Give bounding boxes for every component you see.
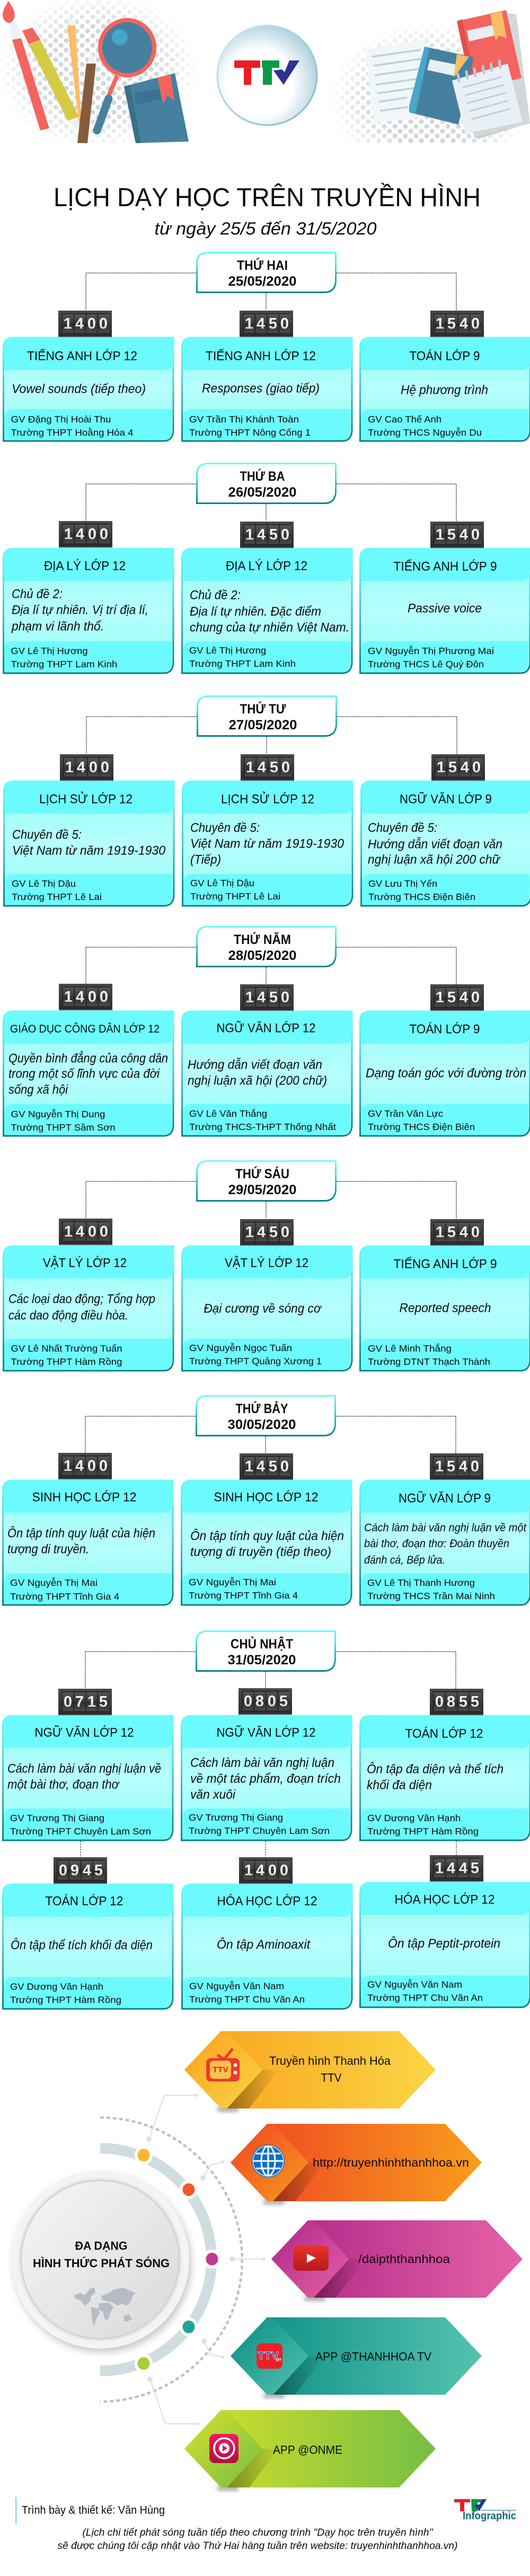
teacher: GV Lê Minh Thắng [368, 1343, 452, 1354]
clock 14:00 [239, 1857, 293, 1884]
clock 14:50: 1450 [245, 526, 289, 543]
card: Ngữ văn 9 [360, 1453, 530, 1605]
topic: Chủ đề 2: [12, 587, 63, 601]
teacher [10, 1577, 119, 1602]
teacher: Trường THCS Nguyễn Du [368, 427, 482, 438]
topic [7, 1525, 155, 1556]
clock 15:40: 1540 [436, 315, 480, 332]
icon: TTV go [257, 2343, 282, 2369]
topic: khối đa diện [367, 1778, 432, 1793]
teacher: GV Nguyễn Thị Mai [10, 1577, 98, 1588]
teacher: GV Nguyễn Thị Mai [189, 1576, 276, 1587]
teacher: GV Nguyễn Ngọc Tuấn [189, 1342, 292, 1353]
teacher: Trường THPT Quảng Xương 1 [189, 1356, 322, 1366]
topic: Passive voice [408, 601, 482, 616]
topic: Ôn tập đa diện và thể tích [367, 1762, 504, 1777]
day header: Chủ Nhật: 31/05/2020 [228, 1653, 296, 1668]
clock 14:00: 1400 [64, 1223, 108, 1240]
topic: Cách làm bài văn nghị luận về [7, 1762, 161, 1776]
clock 15:40: 1540 [435, 1458, 479, 1475]
subject: SINH HỌC LỚP 12 [32, 1490, 137, 1504]
day header: Thứ Ba [86, 463, 456, 521]
teacher [189, 1108, 336, 1132]
day header: Thứ Hai: 25/05/2020 [228, 274, 297, 289]
title: LỊCH DẠY HỌC TRÊN TRUYỀN HÌNH [54, 183, 481, 212]
day header: Thứ Tư: THỨ TƯ [240, 701, 286, 717]
topic: các dao động điều hòa. [8, 1308, 128, 1323]
topic: Vowel sounds (tiếp theo) [12, 382, 146, 396]
subtitle: từ ngày 25/5 đến 31/5/2020 [155, 218, 377, 239]
clock 15:40 [430, 1219, 484, 1246]
teacher: GV Nguyễn Văn Nam [189, 1980, 284, 1991]
teacher: GV Lê Nhất Trường Tuấn [11, 1343, 122, 1354]
teacher: GV Dương Văn Hạnh [367, 1813, 461, 1823]
topic [367, 1762, 504, 1793]
topic: đánh cá, Bếp lửa. [364, 1554, 445, 1566]
topic: Ôn tập tính quy luật của hiện [190, 1529, 344, 1543]
teacher: GV Lưu Thị Yến [368, 878, 437, 889]
centre heading: ĐA DẠNG [75, 2239, 127, 2253]
topic [190, 821, 344, 867]
clock 15:40 [430, 1453, 483, 1480]
ring dots [135, 2146, 221, 2373]
clock 15:40: 1540 [436, 1224, 480, 1241]
clock 14:00 [60, 754, 113, 781]
channel: TTV app [231, 2317, 482, 2398]
teacher: Trường THCS Trần Mai Ninh [367, 1591, 495, 1601]
teacher: Trường THPT Sầm Sơn [11, 1122, 116, 1133]
subject: SINH HỌC LỚP 12 [214, 1490, 318, 1504]
card: Địa lý 12 part 2 [182, 522, 352, 673]
card: Sinh học 12 [3, 1453, 173, 1605]
centre heading: HÌNH THỨC PHÁT SÓNG [33, 2257, 170, 2270]
app text: APP @ONME [273, 2443, 342, 2456]
topic: một bài thơ, đoạn thơ [7, 1778, 120, 1792]
topic: tượng di truyền (tiếp theo) [190, 1545, 331, 1559]
teacher [367, 1813, 479, 1837]
teacher: Trường THPT Hàm Rồng [367, 1826, 479, 1837]
centre circle [11, 2171, 191, 2352]
day header: Thứ Hai: THỨ HAI [237, 257, 288, 273]
subject: NGỮ VĂN LỚP 12 [216, 1021, 316, 1036]
teacher [367, 1577, 495, 1601]
logo: TTV Infographic: Infographic [463, 2510, 516, 2522]
topic: Hướng dẫn viết đoạn văn [368, 836, 502, 851]
teacher: GV Trương Thị Giang [10, 1813, 104, 1823]
teacher [12, 878, 102, 902]
teacher: Trường THPT Nông Cống 1 [189, 427, 311, 438]
teacher [10, 1981, 121, 2005]
topic: Reported speech [400, 1301, 491, 1316]
note: sẽ được chúng tôi cập nhật vào Thứ Hai hàng tuần trên website: truyenhinhthanhhoa.vn) [57, 2540, 458, 2552]
topic [364, 1521, 527, 1566]
topic [12, 828, 165, 858]
topic: Chủ đề 2: [190, 588, 241, 602]
card: Toán 12 [360, 1689, 530, 1840]
topic: Hệ phương trình [401, 383, 488, 398]
card: Hóa học 12 part 2 [360, 1855, 530, 2007]
card: Tiếng Anh 12 [3, 311, 173, 441]
clock 14:50: 1450 [246, 759, 290, 776]
topic [190, 1529, 344, 1559]
clock 08:05 [238, 1688, 292, 1715]
icon: TTV go: TTV [258, 2350, 279, 2362]
teacher: GV Trần Thị Khánh Toàn [189, 414, 299, 425]
teacher [368, 1343, 490, 1367]
clock 08:55: 0855 [435, 1693, 479, 1710]
teacher: GV Nguyễn Thị Dung [11, 1108, 105, 1119]
day header: Thứ Năm: THỨ NĂM [234, 931, 291, 947]
clock 14:50 [240, 522, 294, 548]
day header: Thứ Năm [86, 927, 456, 984]
teacher: Trường THPT Chu Văn An [367, 1992, 483, 2003]
teacher [11, 1343, 122, 1367]
clock 14:50: 1450 [245, 1224, 289, 1241]
topic [8, 1051, 168, 1097]
teacher [189, 645, 296, 669]
subject: NGỮ VĂN LỚP 12 [35, 1725, 134, 1740]
subject: NGỮ VĂN LỚP 9 [400, 792, 492, 807]
subject: HÓA HỌC LỚP 12 [217, 1894, 317, 1908]
card: Ngữ văn 12 part 2 [181, 1688, 351, 1840]
logo: TTV circle [217, 25, 317, 125]
logo: TTV Infographic [454, 2499, 516, 2522]
topic: Địa lí tự nhiên. Vị trí địa lí, [12, 603, 148, 617]
teacher: Trường THPT Lam Kinh [11, 659, 118, 669]
teacher: Trường THPT Tĩnh Gia 4 [10, 1591, 119, 1602]
topic [7, 1762, 161, 1792]
teacher: GV Nguyễn Thị Phương Mai [368, 645, 494, 656]
teacher: GV Cao Thế Anh [368, 414, 441, 425]
app text: APP @THANHHOA TV [315, 2350, 431, 2363]
card: Toán 9 [360, 311, 530, 441]
icon: play button [293, 2246, 329, 2271]
topic: Các loại dao động; Tổng hợp [8, 1292, 155, 1306]
channel text [269, 2054, 391, 2084]
topic: Ôn tập tính quy luật của hiện [7, 1525, 155, 1540]
subject: NGỮ VĂN LỚP 12 [216, 1725, 316, 1740]
topic: Địa lí tự nhiên. Đặc điểm [190, 604, 321, 619]
clock 07:15: 0715 [64, 1693, 108, 1710]
clock 14:00: 1400 [64, 526, 108, 543]
clock 15:40: 1540 [436, 526, 480, 543]
channel: ONME app [184, 2410, 436, 2491]
teacher: GV Lê Thị Dậu [12, 878, 76, 889]
teacher: Trường THPT Lê Lai [190, 891, 280, 902]
channel: YouTube [271, 2220, 523, 2301]
credit: Trình bày & thiết kế: Văn Hùng [22, 2504, 165, 2517]
card: Giáo dục công dân 12 [3, 984, 173, 1136]
topic: Chuyên đề 5: [368, 821, 437, 835]
topic [188, 1057, 327, 1088]
teacher: Trường THPT Chu Văn An [189, 1994, 305, 2005]
teacher: Trường THPT Lê Lai [12, 892, 102, 902]
subject: TOÁN LỚP 9 [409, 349, 480, 364]
topic: Ôn tập thể tích khối đa diện [11, 1938, 153, 1953]
topic: văn xuôi [190, 1787, 236, 1802]
topic: Cách làm bài văn nghị luận [190, 1755, 334, 1770]
card: Ngữ văn 9 [361, 754, 530, 906]
day header: Thứ Sáu [86, 1161, 456, 1219]
note [57, 2527, 458, 2552]
day header: Thứ Hai [86, 252, 456, 310]
topic: nghị luận xã hội (200 chữ) [188, 1074, 327, 1088]
clock 09:45 [54, 1857, 107, 1884]
day header: Thứ Bảy [85, 1396, 456, 1453]
topic: bài thơ, đoạn thơ: Đoàn thuyền [364, 1537, 509, 1550]
teacher: Trường DTNT Thạch Thành [368, 1356, 490, 1367]
subject: LỊCH SỬ LỚP 12 [39, 791, 132, 807]
header illustration: right books and notes [329, 10, 530, 143]
clock 14:00 [59, 1219, 112, 1246]
website text: http://truyenhinhthanhhoa.vn [313, 2156, 469, 2169]
channel text: TTV [321, 2071, 342, 2084]
channel: TTV television [184, 2031, 436, 2112]
teacher [11, 1108, 116, 1133]
subject: TIẾNG ANH LỚP 9 [393, 559, 497, 574]
subject: TOÁN LỚP 12 [405, 1727, 483, 1741]
card: Lịch sử 12 [4, 754, 174, 906]
subject: TIẾNG ANH LỚP 12 [27, 349, 137, 364]
clock 14:00: 1400 [64, 989, 108, 1005]
clock 15:40: 1540 [437, 759, 481, 776]
teacher: GV Nguyễn Văn Nam [367, 1979, 462, 1990]
teacher [190, 878, 280, 902]
teacher: GV Lê Văn Thắng [189, 1108, 267, 1119]
day header: Chủ Nhật [85, 1631, 456, 1689]
day header: Thứ Bảy: THỨ BẢY [235, 1400, 288, 1416]
clock 08:55 [430, 1689, 483, 1715]
clock 14:50: 1450 [245, 315, 289, 332]
teacher [189, 414, 311, 438]
card: Tiếng Anh 9 [360, 1219, 530, 1371]
teacher [189, 1342, 322, 1366]
topic: Chuyên đề 5: [190, 821, 260, 835]
teacher [368, 414, 482, 438]
clock 14:00: 1400 [64, 315, 108, 332]
teacher: Trường THPT Chuyên Lam Sơn [10, 1826, 151, 1837]
icon: ONME [209, 2434, 238, 2463]
card: Ngữ văn 12 [3, 1689, 173, 1840]
teacher [189, 1980, 305, 2005]
teacher [11, 414, 134, 438]
clock 14:50 [240, 1453, 293, 1480]
clock 08:05: 0805 [244, 1693, 288, 1710]
teacher: Trường THPT Hàm Rồng [10, 1995, 121, 2005]
clock 14:00 [58, 1453, 112, 1480]
clock 14:50: 1450 [245, 989, 289, 1006]
card: Hóa học 12 [182, 1857, 352, 2009]
teacher: GV Dương Văn Hạnh [10, 1981, 103, 1992]
teacher: GV Lê Thị Hương [189, 645, 266, 656]
clock 09:45: 0945 [59, 1862, 103, 1879]
card: Tiếng Anh 12 part 2 [182, 311, 352, 441]
topic [368, 821, 502, 867]
topic: (Tiếp) [190, 852, 221, 867]
connectors to second Sunday row [81, 1841, 456, 1857]
topic: tượng di truyền. [7, 1542, 89, 1556]
teacher: GV Trần Văn Lực [368, 1108, 443, 1119]
topic: Chuyên đề 5: [12, 828, 82, 842]
teacher: Trường THPT Lam Kinh [189, 658, 296, 669]
teacher [11, 646, 118, 669]
topic: Quyền bình đẳng của công dân [8, 1051, 168, 1065]
clock 14:50 [240, 984, 294, 1011]
clock 15:40 [430, 984, 484, 1011]
card: Địa lý 12 [3, 521, 173, 673]
youtube text: /daipththanhhoa [358, 2253, 450, 2265]
day header: Chủ Nhật: CHỦ NHẬT [231, 1636, 293, 1652]
topic: Việt Nam từ năm 1919-1930 [12, 844, 165, 858]
topic: Hướng dẫn viết đoạn văn [188, 1057, 322, 1072]
clock 14:50 [240, 311, 293, 337]
subject: TIẾNG ANH LỚP 12 [206, 349, 316, 364]
topic: nghị luận xã hội 200 chữ [368, 852, 500, 867]
teacher: GV Lê Thị Thanh Hương [367, 1577, 475, 1588]
day header: Thứ Sáu: THỨ SÁU [235, 1166, 289, 1181]
day header: Thứ Bảy: 30/05/2020 [228, 1417, 296, 1432]
teacher: Trường THPT Hoằng Hóa 4 [11, 427, 134, 438]
subject: ĐỊA LÝ LỚP 12 [44, 559, 126, 574]
icon: TV: TTV [213, 2065, 228, 2075]
icon: globe [252, 2145, 284, 2177]
subject: TOÁN LỚP 12 [46, 1894, 123, 1908]
clock 14:00: 1400 [64, 1458, 108, 1475]
clock 15:40 [430, 522, 484, 548]
subject: LỊCH SỬ LỚP 12 [221, 791, 314, 807]
topic [11, 587, 148, 634]
teacher: GV Lê Thị Hương [11, 646, 88, 656]
clock 14:00 [59, 984, 112, 1010]
card: Toán 9 [360, 984, 530, 1136]
icon: TV [206, 2049, 240, 2081]
teacher: Trường THPT Chuyên Lam Sơn [189, 1825, 330, 1836]
card: Ngữ văn 12 [182, 984, 352, 1136]
clock 15:40: 1540 [436, 989, 480, 1006]
day header: Thứ Tư [86, 696, 457, 754]
card: Toán 12 row 2 [3, 1857, 173, 2009]
teacher: Trường THPT Tĩnh Gia 4 [189, 1590, 298, 1601]
clock 14:00 [58, 311, 112, 337]
icon: world map [74, 2287, 136, 2326]
clock 15:40 [431, 754, 485, 781]
topic: Responses (giao tiếp) [202, 382, 320, 395]
day header: Thứ Tư: 27/05/2020 [229, 718, 297, 733]
topic [190, 1755, 341, 1802]
subject: NGỮ VĂN LỚP 9 [399, 1490, 491, 1505]
topic: chung của tự nhiên Việt Nam. [190, 620, 349, 635]
centre heading [33, 2239, 170, 2270]
teacher [189, 1576, 298, 1601]
day header: Thứ Sáu: 29/05/2020 [228, 1183, 297, 1197]
subject: VẬT LÝ LỚP 12 [43, 1256, 127, 1270]
clock 14:50 [240, 1219, 294, 1246]
teacher: Trường THCS Lê Quý Đôn [368, 659, 484, 669]
clock 14:00: 1400 [65, 759, 109, 776]
teacher [10, 1813, 151, 1837]
topic: phạm vi lãnh thổ. [11, 619, 104, 634]
day header: Thứ Năm: 28/05/2020 [228, 948, 297, 963]
subject: GIÁO DỤC CÔNG DÂN LỚP 12 [10, 1022, 160, 1035]
teacher [367, 1979, 483, 2003]
clock 14:50: 1450 [245, 1458, 289, 1475]
icon: TTV go: go [276, 2357, 281, 2362]
teacher [368, 645, 494, 669]
header illustration: left school supplies [0, 0, 201, 143]
card: Vật lý 12 part 2 [182, 1219, 352, 1371]
subject: TIẾNG ANH LỚP 9 [393, 1256, 497, 1271]
teacher: GV Lê Thị Dậu [190, 878, 254, 888]
topic: Việt Nam từ năm 1919-1930 [190, 836, 344, 851]
note: (Lịch chi tiết phát sóng tuần tiếp theo chương trình "Dạy học trên truyền hình" [83, 2527, 434, 2538]
topic: Đại cương về sóng cơ [204, 1302, 322, 1316]
day header: Thứ Ba: THỨ BA [240, 468, 285, 484]
teacher: Trường THCS-THPT Thống Nhất [189, 1122, 336, 1132]
subject: HÓA HỌC LỚP 12 [394, 1892, 495, 1907]
subject: TOÁN LỚP 9 [409, 1022, 480, 1037]
subject: VẬT LÝ LỚP 12 [225, 1256, 308, 1270]
clock 14:45: 1445 [435, 1860, 479, 1877]
card: Lịch sử 12 part 2 [182, 754, 352, 906]
teacher: GV Đặng Thị Hoài Thu [11, 414, 111, 425]
clock 15:40 [430, 311, 484, 337]
topic: Ôn tập Aminoaxit [217, 1937, 311, 1952]
channel text: Truyền hình Thanh Hóa [269, 2054, 391, 2067]
topic: sống xã hội [8, 1082, 68, 1097]
clock 14:45 [430, 1855, 483, 1882]
card: Sinh học 12 part 2 [181, 1453, 351, 1605]
clock 07:15 [58, 1689, 112, 1715]
subject: ĐỊA LÝ LỚP 12 [226, 559, 307, 574]
topic: Ôn tập Peptit-protein [388, 1936, 500, 1951]
diagram arcs and connectors [100, 2094, 265, 2425]
topic: về một tác phẩm, đoạn trích [190, 1771, 341, 1786]
day header: Thứ Ba: 26/05/2020 [228, 485, 297, 500]
clock 14:50 [241, 754, 294, 781]
teacher [368, 878, 475, 902]
topic: trong một số lĩnh vực của đời [8, 1066, 160, 1081]
channel: website [231, 2124, 482, 2204]
card: Vật lý 12 [3, 1219, 173, 1371]
topic [8, 1292, 155, 1323]
clock 14:00 [59, 521, 112, 548]
teacher: Trường THCS Điện Biên [368, 892, 475, 902]
teacher: Trường THPT Hàm Rồng [11, 1356, 122, 1367]
card: Tiếng Anh 9 [360, 522, 530, 673]
teacher [368, 1108, 475, 1132]
teacher [189, 1812, 330, 1836]
teacher: GV Trương Thị Giang [189, 1812, 283, 1823]
topic [190, 588, 349, 635]
teacher: Trường THCS Điện Biên [368, 1122, 475, 1132]
clock 14:00: 1400 [244, 1862, 288, 1879]
